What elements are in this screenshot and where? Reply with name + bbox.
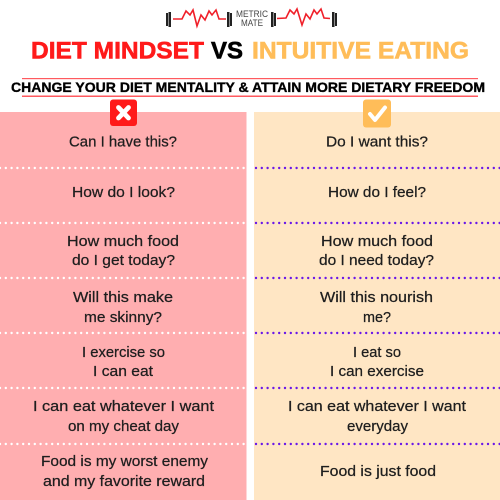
statements: diet mindset: do I get today? [72, 252, 175, 269]
logo: Metric Mate [166, 9, 337, 28]
statements: diet mindset: I can eat whatever I want [33, 398, 215, 415]
title: VS [211, 38, 243, 64]
statements: intuitive eating: do I need today? [319, 252, 434, 269]
panel: intuitive eating [254, 112, 500, 500]
statements: intuitive eating: Will this nourish [320, 289, 433, 306]
statements: intuitive eating: everyday [347, 418, 408, 435]
logo: Metric Mate: MATE [241, 18, 263, 28]
statements: intuitive eating: I can exercise [330, 363, 424, 380]
statements: diet mindset: me skinny? [84, 309, 162, 326]
dotted dividers [0, 168, 246, 444]
statements: diet mindset: Will this make [73, 289, 173, 306]
dotted dividers [256, 168, 500, 444]
statements: diet mindset: Can I have this? [69, 134, 177, 150]
statements: intuitive eating: Food is just food [320, 463, 436, 480]
statements: diet mindset: I exercise so [82, 344, 165, 361]
statements: intuitive eating: I eat so [353, 344, 401, 361]
icon: orange check [363, 100, 391, 128]
statements: intuitive eating: I can eat whatever I want [288, 398, 467, 415]
statements: diet mindset: How much food [67, 233, 179, 250]
statements: intuitive eating: Do I want this? [326, 134, 428, 150]
title [31, 38, 469, 64]
statements: intuitive eating [288, 134, 467, 480]
title: INTUITIVE EATING [252, 38, 469, 64]
panel: diet mindset [0, 112, 246, 500]
logo: Metric Mate: METRIC [236, 9, 268, 19]
statements: intuitive eating: How do I feel? [328, 184, 426, 201]
statements: diet mindset: on my cheat day [68, 418, 180, 435]
statements: diet mindset: Food is my worst enemy [41, 453, 209, 470]
statements: diet mindset: How do I look? [72, 184, 175, 201]
icon: red cross [110, 100, 137, 126]
title: DIET MINDSET [31, 38, 204, 64]
statements: intuitive eating: me? [363, 309, 391, 326]
statements: diet mindset: I can eat [93, 363, 154, 380]
statements: diet mindset: and my favorite reward [43, 473, 205, 490]
statements: intuitive eating: How much food [321, 233, 433, 250]
statements: diet mindset [33, 134, 215, 490]
subtitle with rules: CHANGE YOUR DIET MENTALITY & ATTAIN MORE DIETARY FREEDOM [11, 79, 485, 95]
